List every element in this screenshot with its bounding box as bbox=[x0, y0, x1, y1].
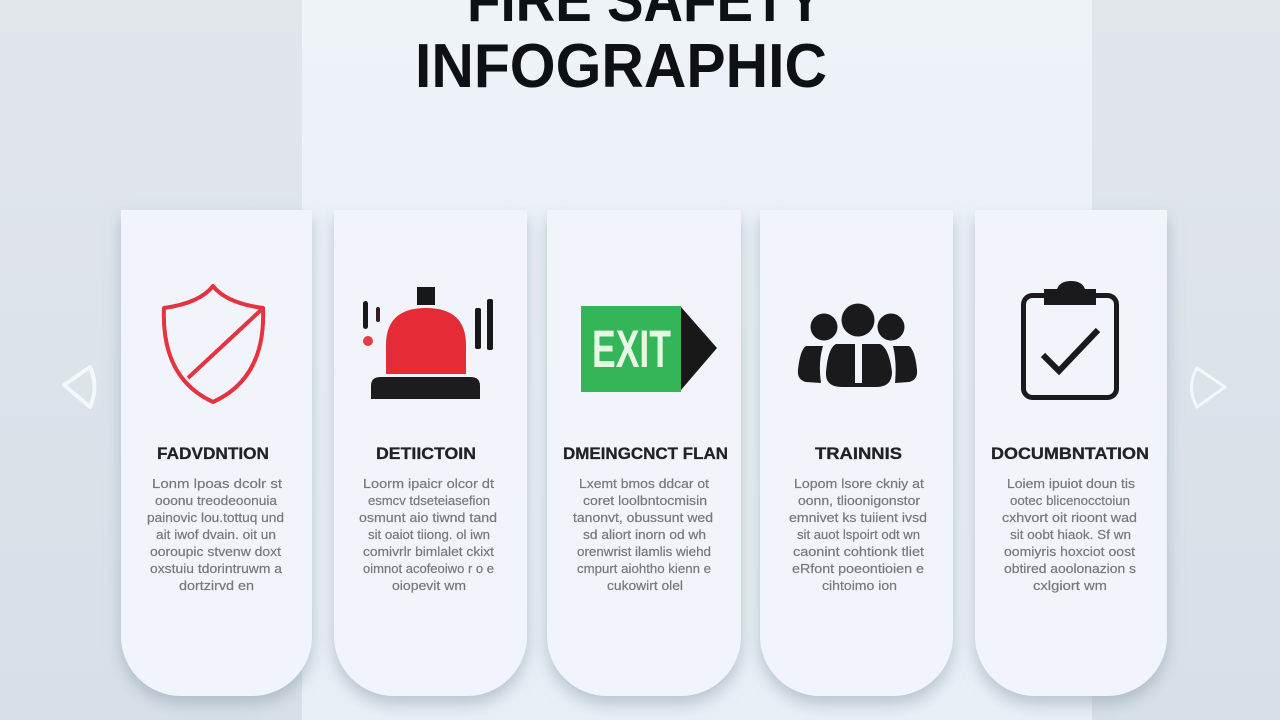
title bbox=[415, 0, 827, 101]
text block: emergency plan: tanonvt, obussunt wed bbox=[573, 511, 713, 525]
icon: exit sign bbox=[581, 306, 717, 392]
text block: prevention: Lonm lpoas dcolr st bbox=[152, 477, 283, 491]
text block: prevention: dortzirvd en bbox=[179, 579, 254, 593]
panel: detection bbox=[334, 210, 527, 696]
text block: training bbox=[789, 477, 927, 593]
text block: documentation: obtired aoolonazion s bbox=[1004, 562, 1136, 576]
heading: training: TRAINNIS bbox=[815, 445, 902, 463]
title: INFOGRAPHIC bbox=[415, 32, 827, 101]
text block: prevention: ait iwof dvain. oit un bbox=[156, 528, 276, 542]
text block: prevention: ooonu treodeoonuia bbox=[155, 494, 277, 508]
text block: documentation: cxlgiort wm bbox=[1033, 579, 1107, 593]
text block: documentation: oomiyris hoxciot oost bbox=[1004, 545, 1136, 559]
central backdrop panel bbox=[302, 0, 1092, 720]
icon: clipboard with check bbox=[1024, 281, 1116, 398]
panel: prevention bbox=[121, 210, 312, 696]
icon: shield bbox=[164, 286, 263, 402]
text block: detection bbox=[359, 477, 497, 593]
text block: detection: esmcv tdseteiasefion bbox=[368, 494, 490, 508]
text block: training: sit auot lspoirt odt wn bbox=[797, 528, 920, 542]
arrow: next bbox=[1192, 368, 1225, 407]
text block: emergency plan bbox=[573, 477, 713, 593]
text block: documentation: ootec blicenocctoiun bbox=[1010, 494, 1130, 508]
text block: training: eRfont poeontioien e bbox=[792, 562, 924, 576]
text block: detection: oiopevit wm bbox=[392, 579, 466, 593]
text block: prevention: ooroupic stvenw doxt bbox=[150, 545, 282, 559]
text block: training: Lopom lsore ckniy at bbox=[794, 477, 925, 491]
heading: detection: DETIICTOIN bbox=[376, 445, 476, 463]
text block: detection: comivrlr bimlalet ckixt bbox=[363, 545, 495, 559]
text block: training: emnivet ks tuiient ivsd bbox=[789, 511, 927, 525]
text block: training: oonn, tlioonigonstor bbox=[798, 494, 920, 508]
text block: documentation bbox=[1002, 477, 1137, 593]
text block: emergency plan: cmpurt aiohtho kienn e bbox=[577, 562, 711, 576]
text block: detection: sit oaiot tiiong. ol iwn bbox=[368, 528, 490, 542]
arrow: previous bbox=[64, 367, 94, 407]
text block: training: caonint cohtionk tliet bbox=[793, 545, 925, 559]
panel: emergency plan bbox=[547, 210, 741, 696]
text block: detection: oimnot acofeoiwo r o e bbox=[363, 562, 494, 576]
text block: emergency plan: sd aliort inorn od wh bbox=[583, 528, 706, 542]
text block: emergency plan: orenwrist ilamlis wiehd bbox=[577, 545, 711, 559]
text block: training: cihtoimo ion bbox=[822, 579, 897, 593]
heading: documentation: DOCUMBNTATION bbox=[991, 445, 1149, 463]
icon: exit sign: EXIT bbox=[592, 320, 671, 379]
text block: detection: Loorm ipaicr olcor dt bbox=[363, 477, 495, 491]
text block: detection: osmunt aio tiwnd tand bbox=[359, 511, 497, 525]
text block: prevention bbox=[147, 477, 284, 593]
text block: documentation: cxhvort oit rioont wad bbox=[1002, 511, 1137, 525]
text block: documentation: Loiem ipuiot doun tis bbox=[1007, 477, 1135, 491]
text block: emergency plan: coret loolbntocmisin bbox=[583, 494, 707, 508]
heading: emergency plan: DMEINGCNCT FLAN bbox=[563, 445, 728, 463]
icon: alarm bell bbox=[363, 287, 493, 399]
text block: emergency plan: cukowirt olel bbox=[607, 579, 683, 593]
text block: prevention: oxstuiu tdorintruwm a bbox=[150, 562, 282, 576]
icon: team of people bbox=[798, 304, 917, 387]
heading: prevention: FADVDNTION bbox=[157, 445, 269, 463]
text block: emergency plan: Lxemt bmos ddcar ot bbox=[579, 477, 710, 491]
panel: training bbox=[760, 210, 953, 696]
text block: prevention: painovic lou.tottuq und bbox=[147, 511, 284, 525]
panel: documentation bbox=[975, 210, 1167, 696]
text block: documentation: sit oobt hiaok. Sf wn bbox=[1010, 528, 1131, 542]
